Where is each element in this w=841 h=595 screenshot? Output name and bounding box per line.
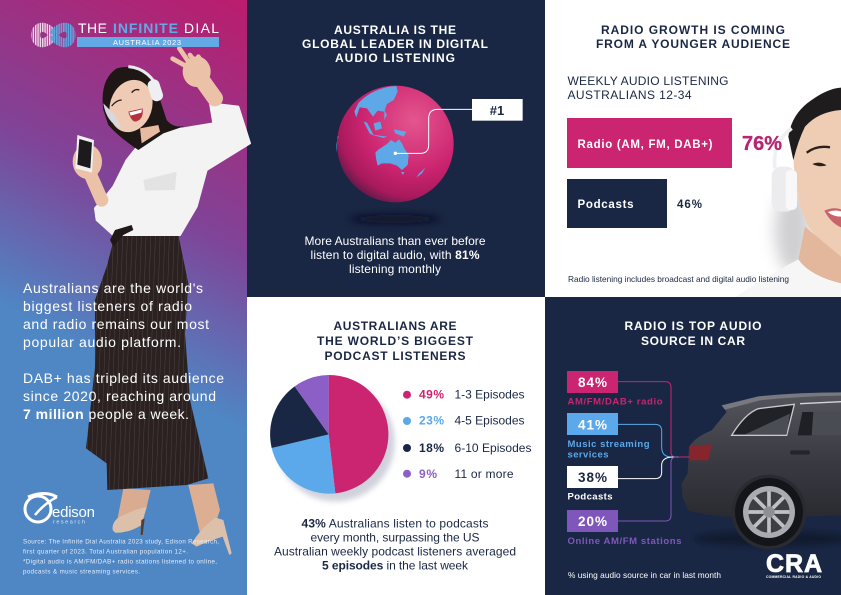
bar: radio: 76% (742, 133, 782, 155)
text: intro paragraph: since 2020, reaching around (23, 388, 216, 404)
legend item: 23%: 4-5 Episodes (454, 414, 524, 428)
heading: FROM A YOUNGER AUDIENCE (596, 37, 790, 51)
body text (304, 234, 486, 276)
heading (302, 23, 488, 65)
panel: global leader (302, 23, 523, 276)
stat: streaming 41% (567, 413, 650, 460)
stat: streaming 41%: Music streaming (568, 439, 650, 450)
stat: online stations 20%: 20% (578, 514, 607, 529)
heading: AUDIO LISTENING (335, 51, 455, 65)
stat: online stations 20% (567, 510, 682, 547)
body text: every month, surpassing the US (310, 531, 480, 545)
heading: THE WORLD’S BIGGEST (317, 334, 474, 348)
logo: The Infinite Dial (36, 20, 219, 47)
legend item: 23%: 23% (419, 414, 444, 428)
text: intro paragraph: 7 million people a week. (23, 406, 189, 422)
logo: The Infinite Dial: AUSTRALIA 2023 (113, 38, 181, 47)
heading: GLOBAL LEADER IN DIGITAL (302, 37, 488, 51)
text: intro paragraph: Australians are the world's (23, 280, 203, 296)
text: source note: Source: The Infinite Dial Australia 2023 study, Edison Research, (23, 538, 219, 545)
stat: podcasts 38%: 38% (578, 470, 607, 485)
body text: More Australians than ever before (304, 234, 486, 248)
bar: podcasts (567, 179, 702, 228)
icon: infinity (36, 27, 71, 43)
legend item: 49%: 1-3 Episodes (454, 388, 524, 402)
chart subtitle: AUSTRALIANS 12-34 (568, 88, 692, 102)
text: intro paragraph: popular audio platform. (23, 334, 181, 350)
globe with callout: #1 (490, 103, 504, 118)
heading (317, 319, 474, 363)
logo: Edison Research: edison (52, 504, 95, 521)
text: intro paragraph: DAB+ has tripled its audience (23, 370, 224, 386)
stat: online stations 20%: Online AM/FM stations (568, 536, 682, 547)
footnote: % using audio source in car in last month (568, 570, 721, 580)
panel: radio growth (567, 23, 841, 297)
illustration: car (682, 392, 841, 549)
panel: left intro (0, 0, 250, 595)
photo: woman with headphones (73, 48, 250, 555)
logo: CRA: COMMERCIAL RADIO & AUDIO (766, 575, 821, 579)
text: source note: first quarter of 2023. Total Australian population 12+. (23, 548, 188, 556)
legend item: 9% (403, 467, 514, 481)
photo: man with headphones (735, 88, 841, 297)
pie chart (270, 375, 395, 501)
logo: CRA: CRA (766, 550, 822, 578)
stat: streaming 41%: services (568, 450, 608, 460)
footnote: Radio listening includes broadcast and digital audio listening (568, 274, 789, 284)
body text: listen to digital audio, with 81% (310, 248, 480, 262)
heading: RADIO IS TOP AUDIO (624, 319, 762, 333)
heading: AUSTRALIANS ARE (334, 319, 456, 333)
heading: RADIO GROWTH IS COMING (601, 23, 785, 37)
logo: The Infinite Dial: THE (78, 20, 107, 36)
heading (624, 319, 762, 348)
body text (274, 517, 516, 573)
heading (596, 23, 790, 51)
text: intro paragraph (23, 280, 224, 422)
legend (403, 388, 532, 481)
legend item: 23% (403, 414, 524, 428)
stat: radio 84%: AM/FM/DAB+ radio (568, 397, 663, 408)
legend item: 9%: 9% (419, 467, 437, 481)
body text: 43% Australians listen to podcasts (302, 517, 488, 531)
body text: listening monthly (349, 262, 441, 276)
panel backgrounds (247, 0, 841, 595)
stat: podcasts 38%: Podcasts (568, 492, 612, 503)
stat: streaming 41%: 41% (578, 418, 607, 432)
legend item: 18%: 6-10 Episodes (454, 441, 532, 455)
globe with callout (336, 86, 523, 223)
text: source note: *Digital audio is AM/FM/DAB+ radio stations listened to online, (23, 558, 217, 566)
legend item: 18%: 18% (419, 441, 444, 455)
logo: Edison Research: research (53, 520, 85, 526)
bar: podcasts: 46% (677, 199, 702, 211)
stat: radio 84% (567, 371, 663, 408)
heading: SOURCE IN CAR (641, 334, 745, 348)
chart subtitle: WEEKLY AUDIO LISTENING (568, 74, 728, 88)
text: intro paragraph: and radio remains our most (23, 316, 209, 332)
body text: 5 episodes in the last week (322, 559, 469, 573)
bar chart (567, 118, 782, 228)
text: source note: podcasts & music streaming services. (23, 568, 140, 576)
text: intro paragraph: biggest listeners of radio (23, 298, 192, 314)
stat: radio 84%: 84% (578, 375, 607, 390)
legend item: 9%: 11 or more (454, 467, 514, 481)
heading: PODCAST LISTENERS (324, 349, 466, 363)
legend item: 49%: 49% (419, 388, 444, 402)
bar: radio (567, 118, 782, 168)
logo: Edison Research (25, 494, 95, 526)
legend item: 18% (403, 441, 532, 455)
text: source note (23, 538, 219, 576)
heading: AUSTRALIA IS THE (334, 23, 456, 37)
bar: podcasts: Podcasts (578, 199, 634, 211)
bar: radio: Radio (AM, FM, DAB+) (578, 139, 713, 151)
chart subtitle (568, 74, 728, 102)
panel: radio in car (567, 319, 841, 580)
body text: Australian weekly podcast listeners averaged (274, 545, 516, 559)
stat: podcasts 38% (567, 466, 618, 503)
logo: The Infinite Dial: DIAL (184, 20, 219, 36)
legend item: 49% (403, 388, 524, 402)
connector lines (618, 382, 690, 521)
panel: podcast listeners (270, 319, 532, 573)
logo: The Infinite Dial: INFINITE (113, 20, 178, 36)
